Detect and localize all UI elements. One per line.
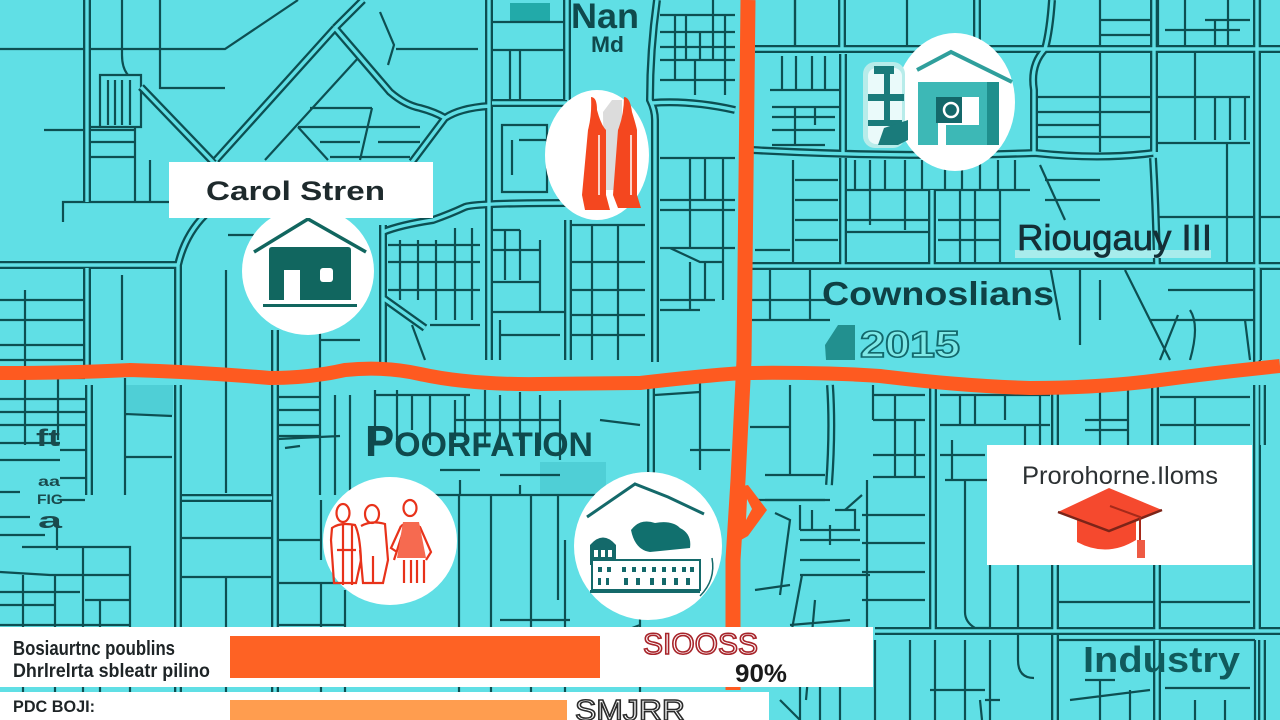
icon: factory circle (574, 472, 722, 620)
small marker labels on left: a (38, 508, 63, 533)
bar: light orange value (230, 700, 567, 720)
small marker labels on left: aa (38, 473, 60, 489)
panel: statistic bar two (0, 692, 769, 720)
icon: graduation cap (1058, 488, 1162, 558)
callout: education: Prorohorne.Iloms (1022, 462, 1218, 490)
small marker labels on left: ft (36, 425, 60, 452)
bar two label: PDC BOJI: (13, 697, 95, 716)
label: Carol Stren (169, 162, 433, 218)
panel: statistic bar one (0, 627, 873, 688)
district label: Cownoslians: Cownoslians (822, 275, 1054, 312)
callout: education (987, 445, 1252, 565)
district label: Rioougauy II: Riougauy III (1017, 217, 1212, 258)
icon: civic building circle (863, 33, 1015, 171)
district year: 2015: 2015 (860, 324, 960, 365)
bar value: 90%: 90% (735, 660, 787, 688)
district year: 2015 (825, 324, 960, 365)
map: shaded blocks (125, 3, 606, 494)
label: Carol Stren: Carol Stren (206, 176, 385, 206)
icon: people circle (323, 477, 457, 605)
subheading: Md: Md (591, 32, 624, 57)
bar labels: Bosiaurtnc poublins (13, 638, 175, 660)
bar labels: Dhrlrelrta sbleatr pilino (13, 661, 210, 682)
bar value scribble: SIOOSS (643, 628, 758, 661)
small marker labels on left: FIG (37, 491, 63, 507)
icon: orange columns circle (545, 90, 649, 220)
heading: Industry: Industry (1083, 639, 1240, 680)
small marker labels on left (36, 425, 63, 533)
bar: orange value (230, 636, 600, 678)
icon: home circle (242, 207, 374, 335)
bar labels (13, 638, 210, 682)
heading: Poorfation: POORFATION (365, 417, 593, 466)
